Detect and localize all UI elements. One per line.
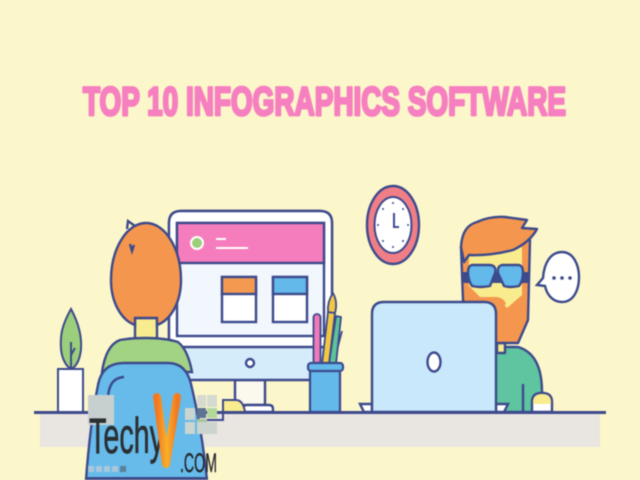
screen header [177,223,324,263]
cuff [532,393,552,412]
neck [497,343,505,353]
logo squares left [88,395,114,425]
desk [34,411,606,447]
logo .COM: .COM [180,448,217,478]
icon: mouse and keyboard [205,400,245,420]
person: bearded man [461,217,552,412]
footer edge line [85,477,207,480]
card: orange [222,277,256,322]
laptop [360,302,508,412]
logo squares bottom [88,466,126,472]
beard and hair back [461,225,530,343]
shirt [102,338,192,372]
icon: plant [58,309,83,412]
head [111,223,181,325]
chair [86,363,207,480]
monitor [169,211,332,412]
face [469,247,522,308]
sunglasses [463,265,528,287]
monitor button [246,359,254,367]
logo V [157,397,177,464]
neck [135,318,157,342]
logo wordmark: Techy [89,408,164,464]
hair tuft [127,221,135,251]
monitor body [169,211,332,380]
hair [461,217,537,262]
mustache [486,297,506,308]
card: blue [273,277,307,322]
person: seated back view [86,221,207,480]
logo: TechyV.com [88,395,217,478]
body [490,347,542,412]
screen [177,223,324,336]
speech bubble [537,252,579,302]
icon: wall clock [367,186,419,264]
logo squares right [185,395,217,434]
icon: pens in cup [308,293,343,412]
monitor stand [235,380,273,412]
